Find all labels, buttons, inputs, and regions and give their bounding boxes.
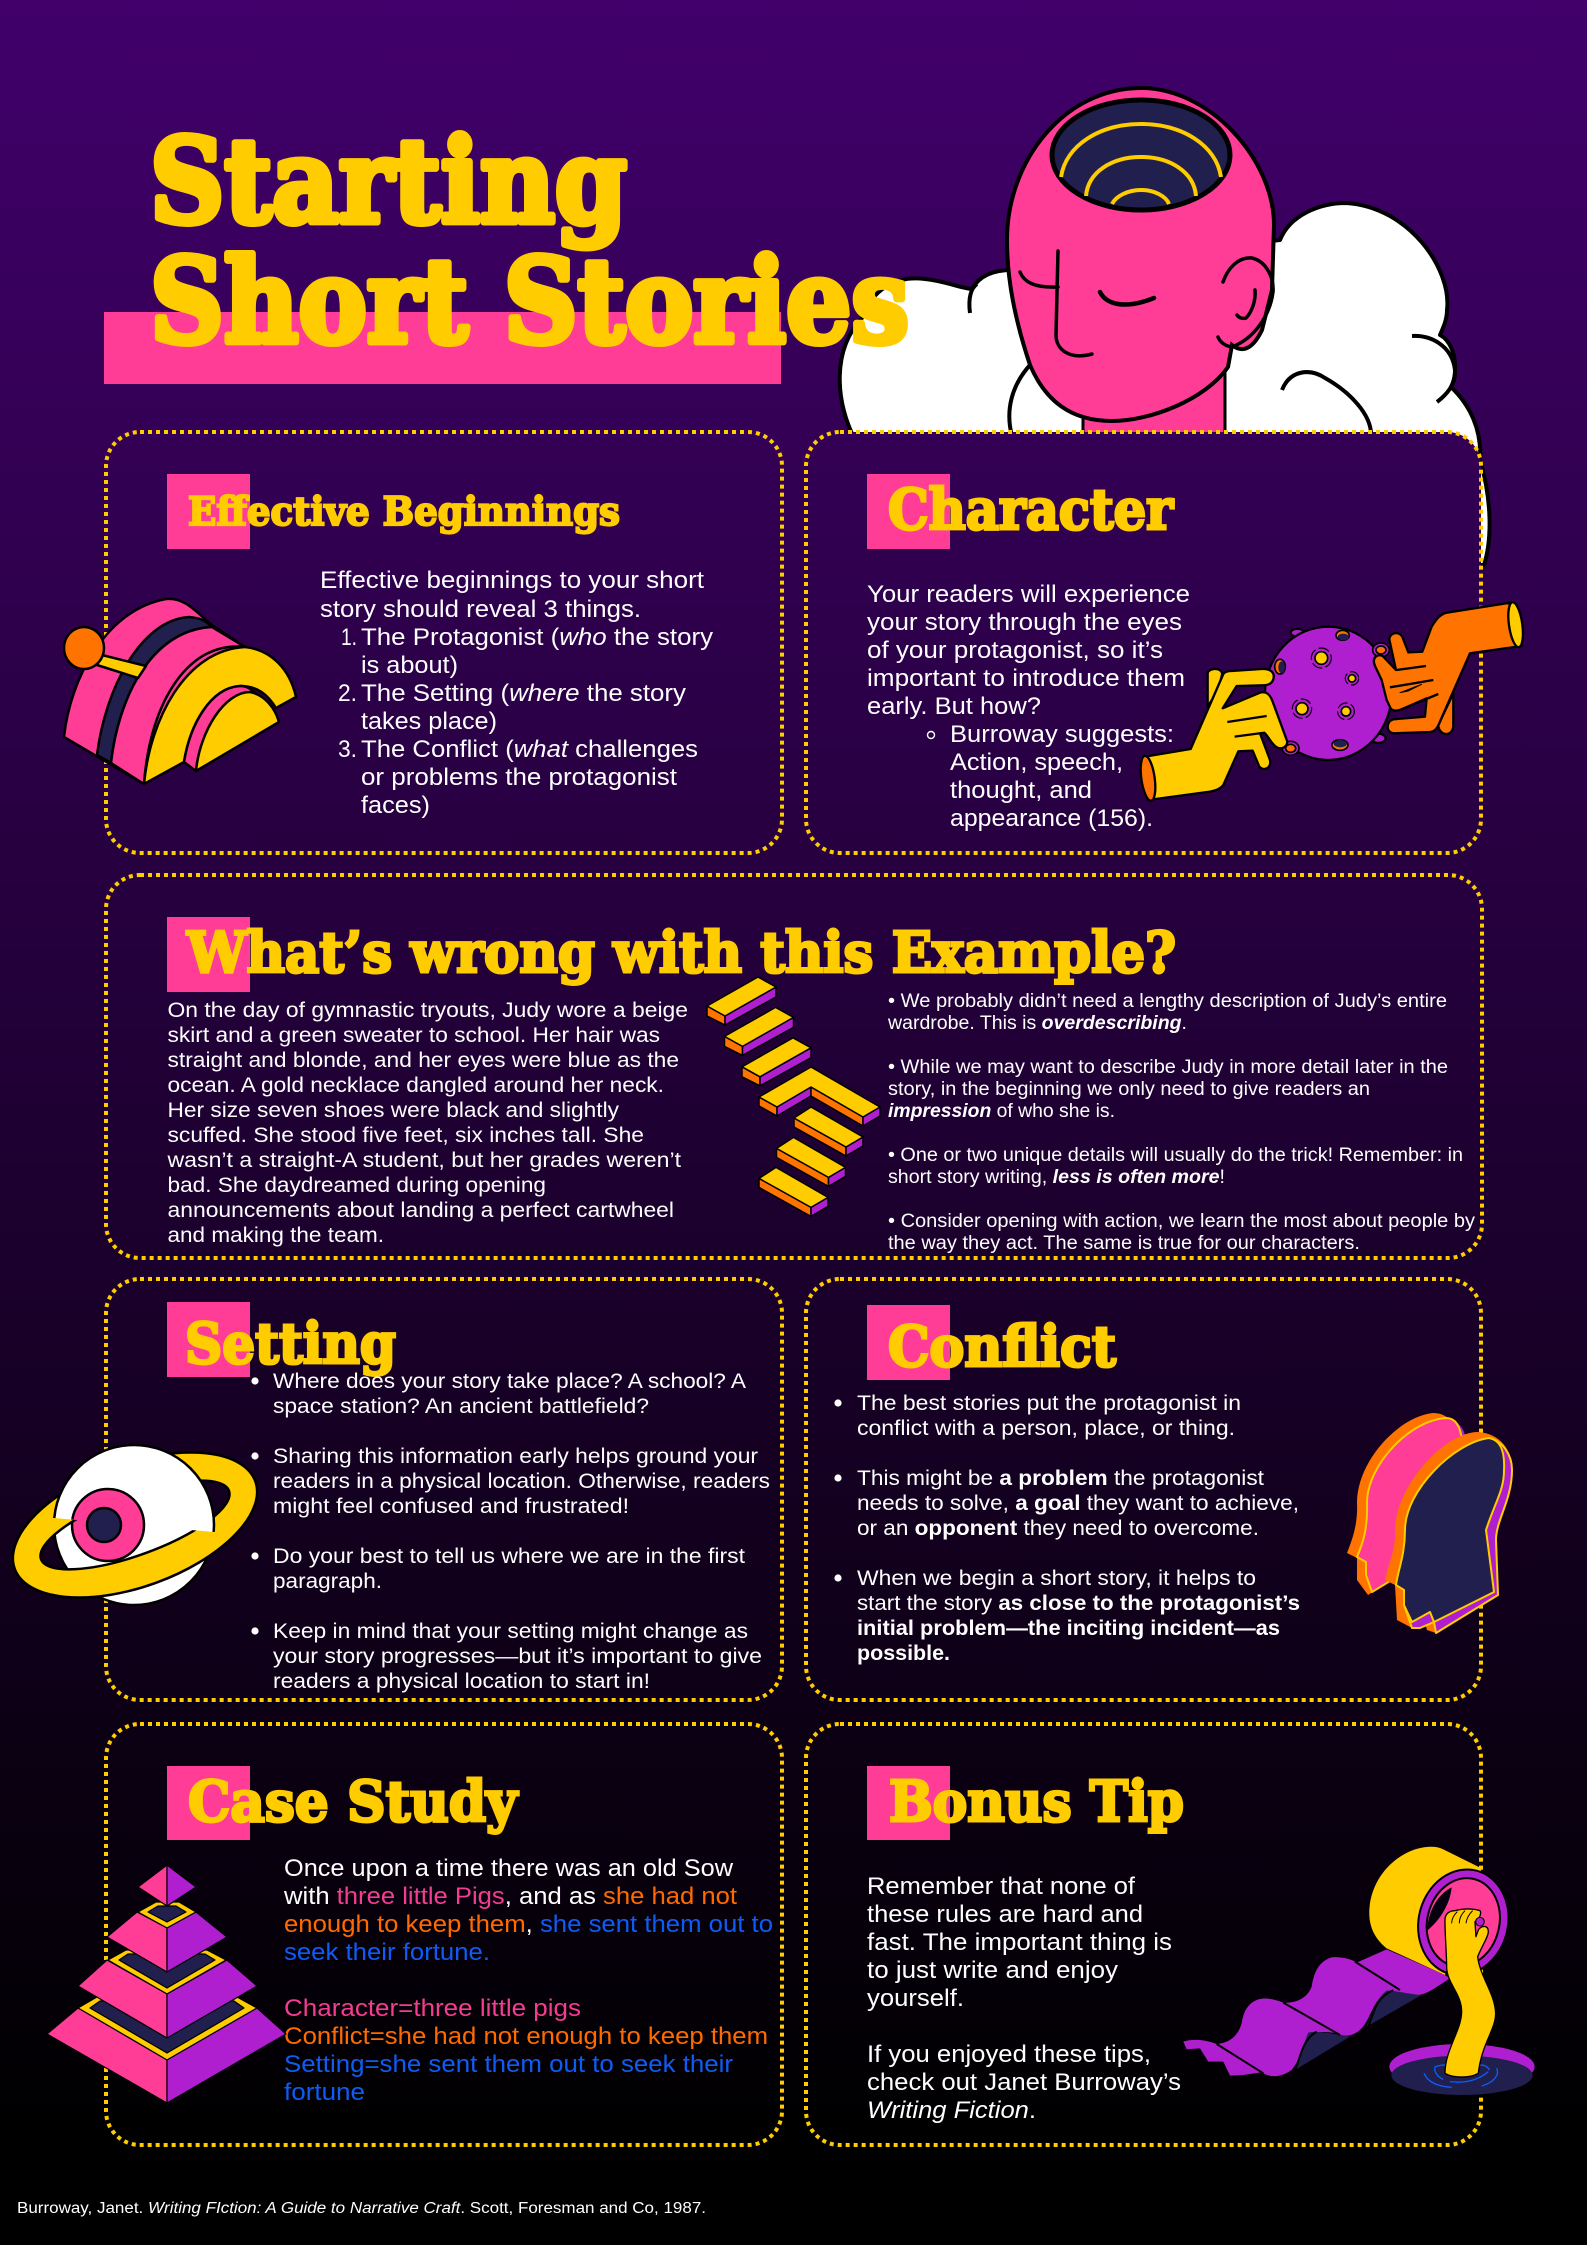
text block: setting bullets: Do your best to tell us where we are in the first (273, 1544, 745, 1568)
text block: judy example: bad. She daydreamed during opening (168, 1173, 546, 1197)
arm and hand (1445, 1909, 1496, 2077)
text block: critique points: short story writing, less is often more ! (888, 1167, 1225, 1188)
text block: three things: or problems the protagonist (361, 764, 677, 791)
icon: rainbow arches with lever (64, 599, 296, 784)
citation: Burroway, Janet. Writing FIction: A Guide to Narrative Craft . Scott, Foresman and Co, 1987. (17, 2200, 706, 2217)
panel: case study (47, 1724, 782, 2145)
heading: case study: Case Study (188, 1769, 518, 1835)
title: Short Stories (150, 234, 909, 370)
text block: conflict bullets: The best stories put the protagonist in (857, 1391, 1241, 1415)
text block: character: Your readers will experience (867, 581, 1190, 608)
text block: three little pigs: Once upon a time there was an old Sow (284, 1855, 733, 1882)
text block: judy example: announcements about landing a perfect cartwheel (168, 1198, 674, 1222)
text block: character: appearance (156). (950, 805, 1153, 832)
title: Starting (150, 114, 627, 250)
text block: critique points: • We probably didn’t need a lengthy description of Judy’s entire (888, 991, 1447, 1012)
text block: conflict bullets: start the story as close to the protagonist’s (857, 1591, 1300, 1615)
text block: three things: faces) (361, 792, 430, 819)
text block: bonus tip: Remember that none of (867, 1873, 1135, 1900)
text block: bonus tip: check out Janet Burroway’s (867, 2069, 1181, 2096)
heading: effective beginnings (167, 474, 620, 549)
text block: three things: The Protagonist ( who the story (361, 624, 714, 651)
text block: conflict bullets: possible. (857, 1641, 950, 1665)
text block: three little pigs: Character=three little pigs (284, 1995, 581, 2022)
text block: character: important to introduce them (867, 665, 1185, 692)
text block: bonus tip: to just write and enjoy (867, 1957, 1119, 1984)
panel border (806, 1724, 1481, 2145)
panel: character (806, 432, 1525, 853)
text block: setting bullets: Where does your story take place? A school? A (273, 1369, 747, 1393)
text block: bonus tip: Writing Fiction . (867, 2097, 1036, 2124)
title (150, 114, 909, 370)
head (1007, 88, 1274, 421)
text block: three things: Effective beginnings to your short (320, 567, 704, 594)
heading: what's wrong: What’s wrong with this Example? (186, 920, 1176, 986)
text block: three things: The Conflict ( what challenges (361, 736, 698, 763)
text block: bonus tip: fast. The important thing is (867, 1929, 1172, 1956)
text block: judy example: straight and blonde, and her eyes were blue as the (168, 1048, 679, 1072)
text block: three little pigs: Setting=she sent them out to seek their (284, 2051, 733, 2078)
text block: critique points: the way they act. The same is true for our characters. (888, 1233, 1360, 1254)
icon: isometric stairs arrow (707, 977, 880, 1216)
title highlight bar (104, 312, 781, 384)
ribbon (1183, 1949, 1450, 2076)
icon: ribbon scroll, roll and hand (1183, 1847, 1535, 2095)
panel: what's wrong with this example (106, 875, 1482, 1258)
text block: conflict bullets: needs to solve, a goal they want to achieve, (857, 1491, 1299, 1515)
text block: critique points: impression of who she is. (888, 1101, 1115, 1122)
text block: character: Action, speech, (950, 749, 1123, 776)
text block: character: of your protagonist, so it’s (867, 637, 1163, 664)
panel border (106, 875, 1482, 1258)
text block: character: early. But how? (867, 693, 1041, 720)
heading: effective beginnings: Effective Beginnings (188, 489, 620, 535)
text block: critique points: • While we may want to describe Judy in more detail later in the (888, 1057, 1448, 1078)
text block: three little pigs: seek their fortune. (284, 1939, 490, 1966)
panel: conflict (806, 1279, 1512, 1700)
text block: judy example: scuffed. She stood five feet, six inches tall. She (168, 1123, 644, 1147)
text block: three things: 3. (338, 736, 357, 763)
text block: character (867, 581, 1190, 832)
text block: three things: The Setting ( where the story (361, 680, 687, 707)
text block: setting bullets: space station? An ancient battlefield? (273, 1394, 649, 1418)
text block: critique points: story, in the beginning we only need to give readers an (888, 1079, 1370, 1100)
text block: conflict bullets: initial problem—the inciting incident—as (857, 1616, 1280, 1640)
panel border (106, 432, 782, 853)
text block: setting bullets: your story progresses—but it’s important to give (273, 1644, 762, 1668)
cloud (840, 203, 1490, 565)
text block: bonus tip: yourself. (867, 1985, 964, 2012)
neck (1083, 370, 1225, 440)
text block: character: Burroway suggests: (950, 721, 1174, 748)
text block: judy example: skirt and a green sweater to school. Her hair was (168, 1023, 660, 1047)
text block: judy example: On the day of gymnastic tryouts, Judy wore a beige (168, 998, 688, 1022)
text block: conflict bullets (834, 1391, 1300, 1665)
panel: setting (0, 1279, 782, 1700)
text block: bonus tip: If you enjoyed these tips, (867, 2041, 1151, 2068)
text block: setting bullets: readers in a physical location. Otherwise, readers (273, 1469, 770, 1493)
text block: three little pigs: with three little Pigs , and as she had not (283, 1883, 737, 1910)
text block: conflict bullets: conflict with a person, place, or thing. (857, 1416, 1235, 1440)
text block: three things: 1. (341, 624, 357, 651)
panel: bonus tip (806, 1724, 1535, 2145)
face lines (1020, 251, 1273, 356)
text block: setting bullets: paragraph. (273, 1569, 382, 1593)
text block: setting bullets: Sharing this information early helps ground your (273, 1444, 758, 1468)
text block: three things (320, 567, 714, 819)
heading: setting: Setting (185, 1311, 396, 1377)
text block: bonus tip (867, 1873, 1181, 2124)
yellow hand (1138, 669, 1287, 802)
icon: layered pyramid (47, 1865, 286, 2103)
heading: character: Character (888, 477, 1174, 543)
panel border (106, 1724, 782, 2145)
text block: three things: 2. (338, 680, 357, 707)
icon: ringed eyeball planet (12, 1444, 258, 1606)
text block: bonus tip: these rules are hard and (867, 1901, 1143, 1928)
icon: hands holding planet (1138, 601, 1525, 802)
text block: setting bullets: might feel confused and frustrated! (273, 1494, 629, 1518)
illustration: head in clouds (840, 88, 1490, 565)
text block: character: your story through the eyes (867, 609, 1182, 636)
icon: two head profiles (1347, 1413, 1512, 1633)
text block: three things: story should reveal 3 things. (320, 596, 641, 623)
text block: conflict bullets: This might be a problem the protagonist (857, 1466, 1264, 1490)
text block: conflict bullets: When we begin a short story, it helps to (857, 1566, 1256, 1590)
water hole (1389, 2044, 1535, 2095)
panel border (806, 432, 1481, 853)
text block: setting bullets: readers a physical location to start in! (273, 1669, 650, 1693)
text block: three little pigs: fortune (284, 2079, 365, 2106)
text block: conflict bullets: or an opponent they need to overcome. (857, 1516, 1259, 1540)
text block: three things: is about) (361, 652, 458, 679)
text block: critique points: • Consider opening with action, we learn the most about people by (888, 1211, 1476, 1232)
text block: three little pigs: Conflict=she had not enough to keep them (284, 2023, 768, 2050)
text block: character: thought, and (950, 777, 1092, 804)
roll (1369, 1847, 1520, 1985)
text block: setting bullets: Keep in mind that your setting might change as (273, 1619, 748, 1643)
panel border (806, 1279, 1481, 1700)
panel: effective beginnings (64, 432, 782, 853)
panel border (106, 1279, 782, 1700)
text block: three little pigs: enough to keep them , she sent them out to (284, 1911, 773, 1938)
text block: critique points: • One or two unique details will usually do the trick! Remember: in (888, 1145, 1463, 1166)
text block: judy example: wasn’t a straight-A student, but her grades weren’t (166, 1148, 681, 1172)
text block: judy example: ocean. A gold necklace dangled around her neck. (168, 1073, 664, 1097)
orange hand (1374, 601, 1525, 734)
text block: three things: takes place) (361, 708, 497, 735)
heading: bonus tip: Bonus Tip (889, 1769, 1184, 1835)
text block: setting bullets (251, 1369, 770, 1693)
heading: conflict: Conflict (888, 1314, 1116, 1380)
text block: judy example: and making the team. (168, 1223, 384, 1247)
text block: three little pigs (283, 1855, 773, 2106)
open head cavity (1052, 100, 1230, 210)
text block: judy example (166, 998, 688, 1247)
text block: critique points (887, 991, 1476, 1254)
planet (1265, 627, 1392, 760)
text block: critique points: wardrobe. This is overdescribing. (887, 1013, 1187, 1034)
text block: judy example: Her size seven shoes were black and slightly (168, 1098, 619, 1122)
